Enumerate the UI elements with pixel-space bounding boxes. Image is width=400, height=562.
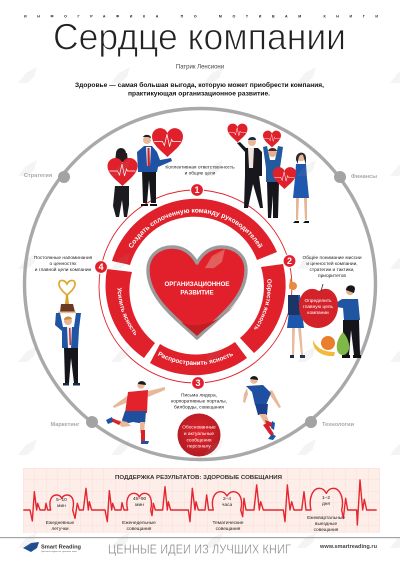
illustration: man with trophy xyxy=(55,280,81,386)
woman xyxy=(287,278,305,358)
factor: marketing xyxy=(51,416,98,428)
meeting 3 xyxy=(212,496,244,532)
segment 4: left: Усилить ясность xyxy=(117,288,136,336)
illustration: people holding an apple xyxy=(287,278,361,358)
caption: mission: приоритетов xyxy=(318,274,346,279)
apple: компании xyxy=(307,311,329,316)
red circle: messages to staff xyxy=(178,414,220,456)
thin red ring xyxy=(99,190,292,383)
meeting 4: дня xyxy=(322,502,330,507)
segment 4: left xyxy=(106,269,155,358)
caption: team: Коллективная ответственность xyxy=(165,164,235,170)
illustration: blue player xyxy=(243,376,281,440)
intro statement: практикующая организационное развитие. xyxy=(128,90,270,98)
heart C xyxy=(273,167,296,189)
red circle: messages to staff: персоналу xyxy=(187,444,211,450)
number 4 xyxy=(95,261,107,273)
meeting 3: совещания xyxy=(216,527,241,532)
meeting 1: летучки xyxy=(51,527,69,532)
caption: communications xyxy=(171,392,227,410)
logo: Ценные идеи из лучших книг xyxy=(41,551,77,553)
meeting 4: Ежеквартальные xyxy=(307,515,345,521)
caption: mission: стратегии и тактики, xyxy=(309,268,355,273)
factor: strategy: Стратегия xyxy=(24,173,52,179)
number 4: 4 xyxy=(98,262,104,272)
red circle: messages to staff: и актуальные xyxy=(184,432,214,437)
logo xyxy=(23,542,82,553)
segment 1: top xyxy=(112,198,277,265)
website: www.smartreading.ru xyxy=(319,544,378,550)
number 3 xyxy=(192,377,204,389)
illustration: woman and man with hearts xyxy=(108,128,183,217)
central heart: РАЗВИТИЕ xyxy=(180,290,214,296)
man xyxy=(137,135,172,206)
caption: reminders: и главной цели компании xyxy=(35,266,92,273)
caption: reminders: Постоянные напоминания xyxy=(34,255,93,261)
woman in blue dress xyxy=(293,153,309,223)
heart B xyxy=(263,131,281,147)
man xyxy=(336,285,361,358)
small heading: ИНФОГРАФИКА ПО МОТИВАМ КНИГИ xyxy=(24,14,378,18)
caption: mission xyxy=(302,255,362,279)
fruit xyxy=(313,332,349,356)
heart with pulse centre xyxy=(152,128,183,157)
heart A xyxy=(228,124,248,142)
caption: reminders: о ценностях xyxy=(50,262,77,267)
meeting 4: совещания xyxy=(314,528,339,533)
author: Патрик Ленсиони xyxy=(176,64,224,70)
factor: technology: Технологии xyxy=(322,422,355,428)
number 1 xyxy=(191,184,203,196)
heart with pulse left xyxy=(108,158,138,186)
apple xyxy=(299,284,338,328)
caption: communications: Письма лидера, xyxy=(181,392,217,398)
panel heading: ПОДДЕРЖКА РЕЗУЛЬТАТОВ: ЗДОРОВЫЕ СОВЕЩАНИЯ xyxy=(115,475,282,481)
meeting 3: Тематические xyxy=(212,520,244,526)
caption: mission: и ценностей компании, xyxy=(306,260,358,267)
central heart xyxy=(148,247,246,338)
outer gray ring with four factors xyxy=(24,108,377,460)
meeting 4: выездные xyxy=(315,522,337,527)
number 1: 1 xyxy=(194,185,200,195)
meeting 1: 5–10 xyxy=(56,497,67,503)
illustration: red player xyxy=(106,381,165,444)
man in black suit xyxy=(237,137,263,208)
factor: technology xyxy=(305,416,355,428)
meeting 4: 1–2 xyxy=(322,495,330,501)
meeting 4 xyxy=(307,495,345,533)
caption: mission: Общее понимание миссии xyxy=(302,255,362,261)
apple: Определить xyxy=(304,298,332,304)
meeting 3: 2–4 xyxy=(223,496,231,502)
red circle: messages to staff: Обоснованные xyxy=(182,424,216,430)
caption: team xyxy=(165,164,235,176)
intro statement: Здоровье — самая большая выгода, которую может приобрести компания, xyxy=(75,81,324,89)
footer divider xyxy=(0,537,400,538)
meeting 1: Ежедневные xyxy=(46,520,75,526)
caption: communications: билборды, совещания xyxy=(174,404,224,410)
number 2: 2 xyxy=(287,256,292,266)
caption: team: и общие цели xyxy=(185,170,216,176)
man in blue xyxy=(263,146,283,218)
title: Сердце компании xyxy=(53,16,346,58)
caption: reminders xyxy=(34,255,93,273)
number 3: 3 xyxy=(195,378,201,388)
trophy xyxy=(58,280,76,313)
ECG line with four hearts xyxy=(23,480,377,525)
meeting 2: мин xyxy=(135,503,144,508)
segment 1: top: Создать сплоченную команду руководителей xyxy=(128,208,263,248)
meeting 1: мин xyxy=(57,504,66,509)
caption: communications: корпоративные порталы, xyxy=(171,400,227,404)
factor: finance xyxy=(334,171,377,183)
meeting 2: Еженедельные xyxy=(122,520,156,526)
central heart: ОРГАНИЗАЦИОННОЕ xyxy=(164,281,230,288)
slogan: ЦЕННЫЕ ИДЕИ ИЗ ЛУЧШИХ КНИГ xyxy=(108,542,291,556)
factor: marketing: Маркетинг xyxy=(51,422,80,428)
segment 3: bottom: Распространить ясность xyxy=(158,352,233,366)
number 2 xyxy=(283,255,296,267)
intro statement xyxy=(75,81,324,98)
meeting 3: часа xyxy=(222,503,232,508)
factor: finance: Финансы xyxy=(351,174,377,180)
red circle: messages to staff: сообщения xyxy=(186,438,212,444)
segment 2: right: Обрести ясность xyxy=(254,279,272,330)
segment 2: right xyxy=(240,264,286,353)
segment 3: bottom xyxy=(150,342,247,376)
panel: healthy meetings xyxy=(23,468,380,533)
logo: Smart Reading xyxy=(41,544,82,550)
factor: strategy xyxy=(24,171,70,183)
meeting 1 xyxy=(46,497,75,532)
man xyxy=(55,313,81,386)
illustration: three colleagues with hearts xyxy=(228,124,309,223)
meeting 2 xyxy=(122,496,156,532)
woman xyxy=(113,148,129,217)
meeting 2: совещания xyxy=(127,527,152,532)
apple: главную цель xyxy=(303,305,334,310)
meeting 2: 45–90 xyxy=(133,496,146,502)
